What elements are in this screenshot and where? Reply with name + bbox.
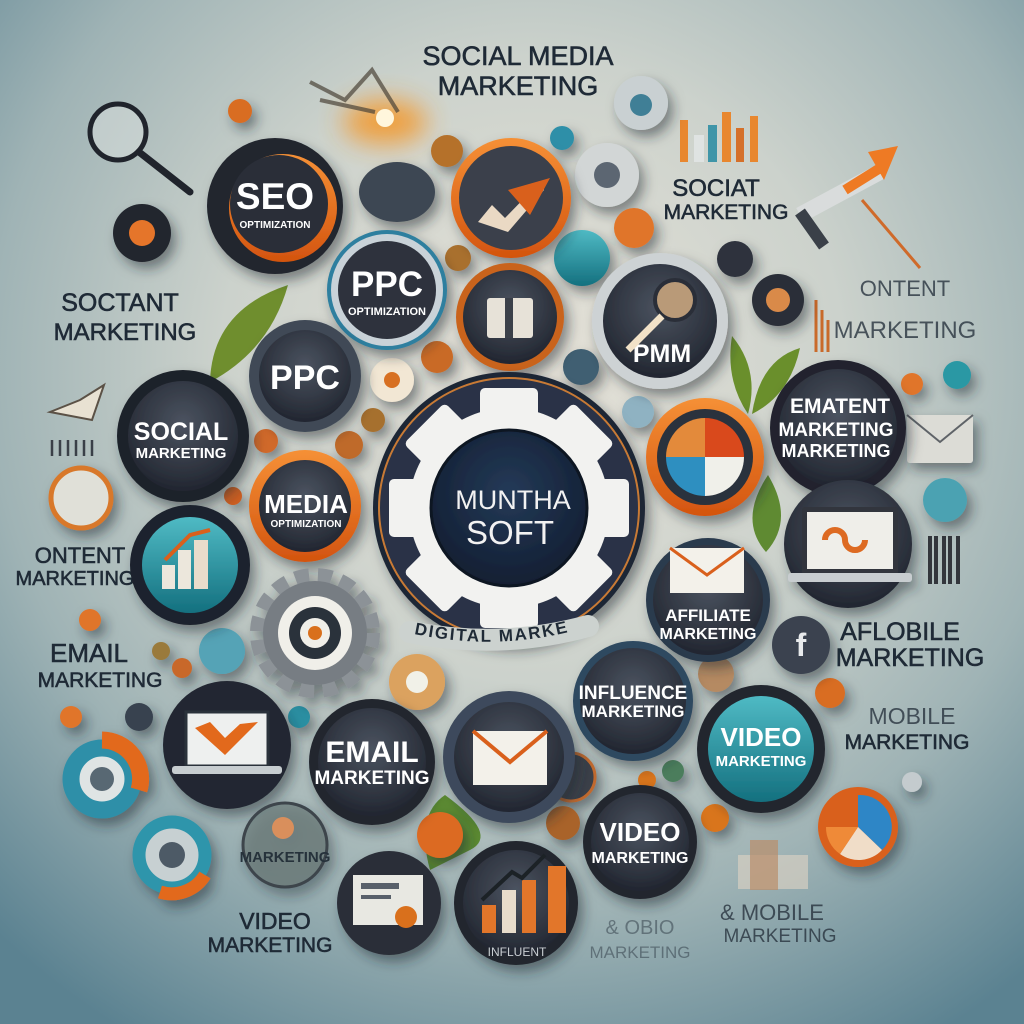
icon: barcode right [930, 536, 958, 584]
panel: bar chart badge: INFLUENT [488, 945, 547, 959]
panel: laptop right [784, 480, 912, 608]
panel: social marketing: MARKETING [136, 445, 226, 462]
label: faded mobio marketing: & OBIO [606, 917, 674, 939]
label: ontent marketing left [16, 543, 134, 590]
panel: influence marketing [573, 641, 693, 761]
panel: influence marketing: MARKETING [582, 702, 684, 721]
label: ontent marketing right: MARKETING [834, 317, 976, 344]
label: aflobile marketing: AFLOBILE [840, 618, 960, 646]
label: video marketing bottom left: MARKETING [208, 934, 332, 957]
icon: magnifying glass [90, 104, 190, 192]
label: video marketing bottom left: VIDEO [239, 908, 311, 934]
panel: email marketing: MARKETING [314, 768, 430, 789]
panel: pmm: PMM [633, 340, 691, 368]
icon: ring chart lower left [139, 822, 205, 894]
panel: influence marketing: INFLUENCE [579, 683, 687, 704]
panel: affiliate marketing: MARKETING [660, 626, 756, 643]
panel: target gear [257, 575, 373, 691]
label: email marketing left: MARKETING [38, 669, 162, 692]
panel: bar chart badge [454, 841, 578, 965]
label: email marketing left: EMAIL [50, 638, 128, 668]
panel: video marketing right: VIDEO [721, 722, 801, 752]
panel: gift icon badge [456, 263, 564, 371]
central gear: muntha soft [373, 372, 645, 644]
panel: video marketing centre: VIDEO [600, 817, 680, 847]
panel: teal chart [130, 505, 250, 625]
label: faded mobio marketing [589, 917, 691, 962]
label: mobile marketing bottom: MARKETING [724, 926, 836, 947]
panel: ppc optimization [329, 232, 445, 348]
panel: orange ring chart [451, 138, 571, 258]
panel: marketing small badge [240, 803, 330, 887]
panel: social marketing: SOCIAL [134, 418, 228, 446]
label: video marketing bottom left [208, 908, 332, 957]
panel: media [249, 450, 361, 562]
label: mobile marketing right [845, 703, 969, 754]
icon: barcode left [52, 440, 92, 456]
panel: marketing small badge: MARKETING [240, 849, 330, 866]
icon: leaves right [730, 336, 800, 414]
icon: paper scraps left [50, 385, 104, 420]
label: mobile marketing bottom: & MOBILE [720, 900, 824, 925]
panel: ppc second [249, 320, 361, 432]
icon: small bars right [816, 300, 828, 352]
panel: ematent marketing: MARKETING [782, 441, 890, 461]
icon: orange growth arrow [800, 146, 920, 268]
panel: laptop left [163, 681, 291, 809]
icon: mini bars bottom [738, 840, 808, 890]
panel: video marketing centre [583, 785, 697, 899]
icon: facebook badge [772, 616, 830, 674]
icon: bar chart top [680, 112, 758, 162]
heading: social media marketing: MARKETING [438, 71, 598, 101]
label: mobile marketing bottom [720, 900, 836, 947]
heading: social media marketing: SOCIAL MEDIA [422, 41, 614, 71]
label: aflobile marketing: MARKETING [836, 644, 984, 672]
panel: ematent marketing: EMATENT [790, 395, 890, 418]
label: social marketing right top: SOCIAT [672, 175, 760, 202]
label: ontent marketing left: ONTENT [35, 543, 125, 568]
panel: ematent marketing: MARKETING [778, 420, 894, 441]
panel: affiliate marketing [646, 538, 770, 662]
panel: seo [207, 138, 343, 274]
label: soctant marketing: SOCTANT [61, 289, 179, 317]
label: ontent marketing right [834, 276, 976, 344]
icon: pie chart bottom right [818, 787, 898, 867]
central gear: muntha soft: MUNTHA [455, 485, 571, 515]
icon: leaves left [210, 285, 288, 382]
label: faded mobio marketing: MARKETING [589, 943, 691, 962]
panel: ppc second: PPC [270, 359, 340, 397]
label: social marketing right top [664, 175, 788, 224]
panel: card badge [337, 851, 441, 955]
panel: ppc optimization: OPTIMIZATION [348, 306, 426, 318]
heading: social media marketing [422, 41, 614, 101]
panel: video marketing right [697, 685, 825, 813]
panel: seo: SEO [236, 176, 314, 217]
panel: video marketing right: MARKETING [716, 753, 806, 770]
label: mobile marketing right: MOBILE [869, 703, 955, 729]
text: digital marketing arc: DIGITAL MARKE [415, 621, 568, 642]
small badges [51, 76, 973, 858]
central gear: muntha soft: SOFT [466, 514, 554, 551]
icon: facebook badge: f [796, 627, 807, 663]
panel: ematent marketing [770, 360, 906, 496]
panel: email marketing [309, 699, 435, 825]
panel: envelope badge [443, 691, 575, 823]
panel: media: MEDIA [264, 489, 348, 519]
gear shape [389, 388, 629, 628]
label: mobile marketing right: MARKETING [845, 731, 969, 754]
icon: leaf bottom [425, 795, 481, 870]
panel: ppc optimization: PPC [351, 265, 423, 304]
panel: media: OPTIMIZATION [271, 519, 341, 530]
label: soctant marketing: MARKETING [54, 319, 196, 346]
label: aflobile marketing [836, 618, 984, 672]
label: soctant marketing [54, 289, 196, 346]
warm glow with sparkle [310, 70, 427, 144]
panel: seo: OPTIMIZATION [240, 220, 310, 231]
band: pale strip behind arc text [410, 626, 588, 640]
panel: video marketing centre: MARKETING [592, 850, 688, 867]
label: social marketing right top: MARKETING [664, 201, 788, 224]
panel: email marketing: EMAIL [325, 736, 419, 769]
label: ontent marketing left: MARKETING [16, 568, 134, 590]
panel: pmm [592, 253, 728, 389]
panel: affiliate marketing: AFFILIATE [665, 606, 751, 625]
panel: social marketing [117, 370, 249, 502]
panel: pie chart [646, 398, 764, 516]
icon: leaf center right [752, 475, 781, 552]
label: email marketing left [38, 638, 162, 692]
icon: ring chart left [71, 740, 141, 810]
label: ontent marketing right: ONTENT [860, 276, 950, 301]
